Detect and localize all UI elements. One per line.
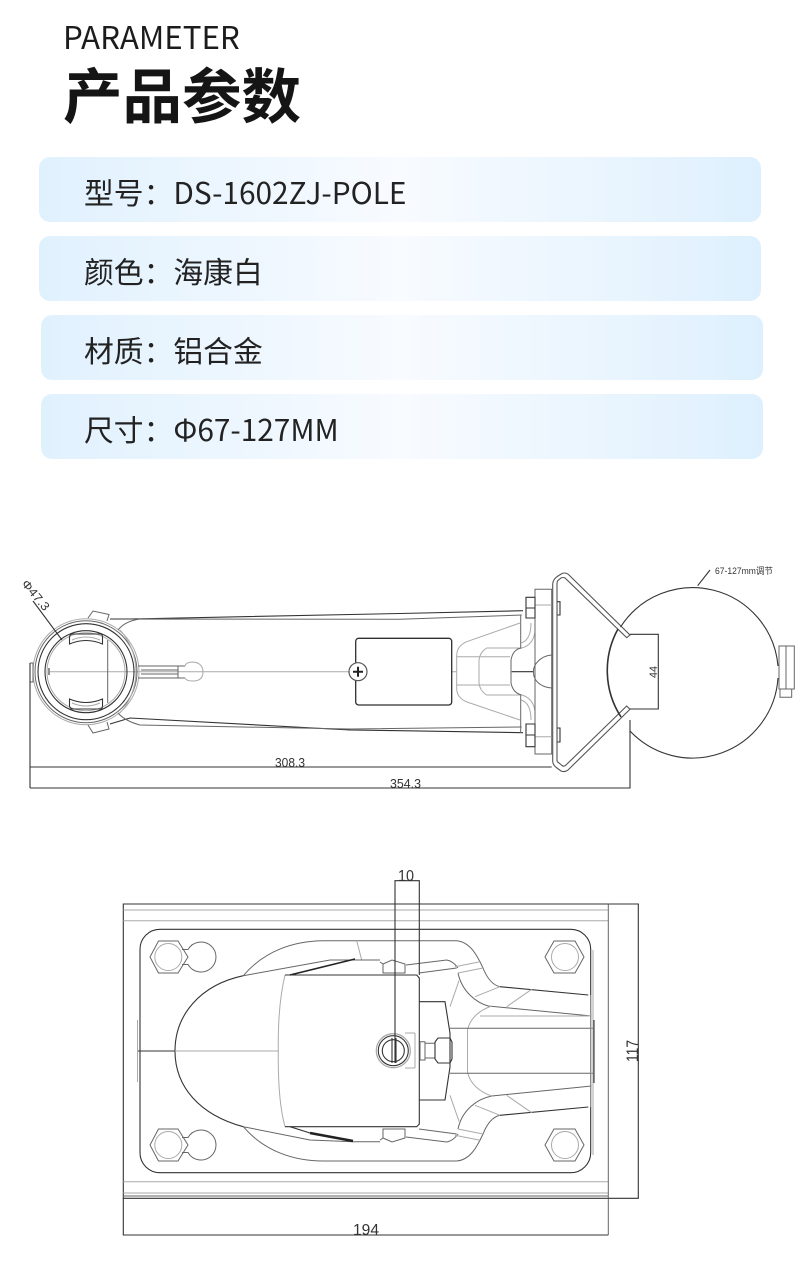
pole annotation: 67-127mm调节 [715,566,773,576]
base plate [123,904,608,1235]
dimension: 354.3 [30,720,630,791]
spec row: material: 材质：铝合金 [84,327,263,371]
side view technical drawing [19,566,794,791]
spec row: size [41,394,763,459]
spec row: material [41,315,763,380]
centre line [50,671,457,673]
dimension: 194 [123,1198,608,1239]
dimension: 308.3 [30,663,552,788]
cover plate with screw [349,638,452,705]
arm body [110,611,523,733]
flange with bolts [526,589,560,754]
rounded housing [138,941,500,1161]
dimension: 194: 194 [353,1222,379,1239]
title: 产品参数: 产品参数 [63,50,301,136]
dimension: 117 [608,904,642,1198]
handle [138,662,203,681]
saddle bracket [450,962,594,1140]
dimension: diameter 47.3: Φ47.3 [19,577,53,614]
pole circle [607,588,794,758]
locking block and screw [376,1002,452,1100]
dimension: 44: 44 [648,666,660,678]
dimension: 354.3: 354.3 [390,777,421,791]
dimension: 308.3: 308.3 [275,756,305,770]
dimension: 10: 10 [398,868,414,885]
spec row: colour: 颜色：海康白 [84,248,263,292]
dimension: 44 [630,634,660,709]
pole ring clamp [30,611,139,733]
pole annotation [698,566,773,586]
centre block [278,975,419,1127]
top view technical drawing [123,868,642,1239]
dimension: 117: 117 [623,1040,642,1062]
spec row: model: 型号：DS-1602ZJ-POLE [84,169,406,213]
spec row: colour [39,236,761,301]
dimension: diameter 47.3 [19,577,62,640]
upper fastener parts [380,960,458,1142]
spec row: model [39,157,761,222]
neck [457,615,552,733]
subtitle: PARAMETER: PARAMETER [63,14,240,59]
dimension: 10 [395,868,419,1063]
mounting bolts and slots [150,941,584,1161]
V strap [553,573,630,772]
spec row: size: 尺寸：Φ67-127MM [84,406,339,450]
